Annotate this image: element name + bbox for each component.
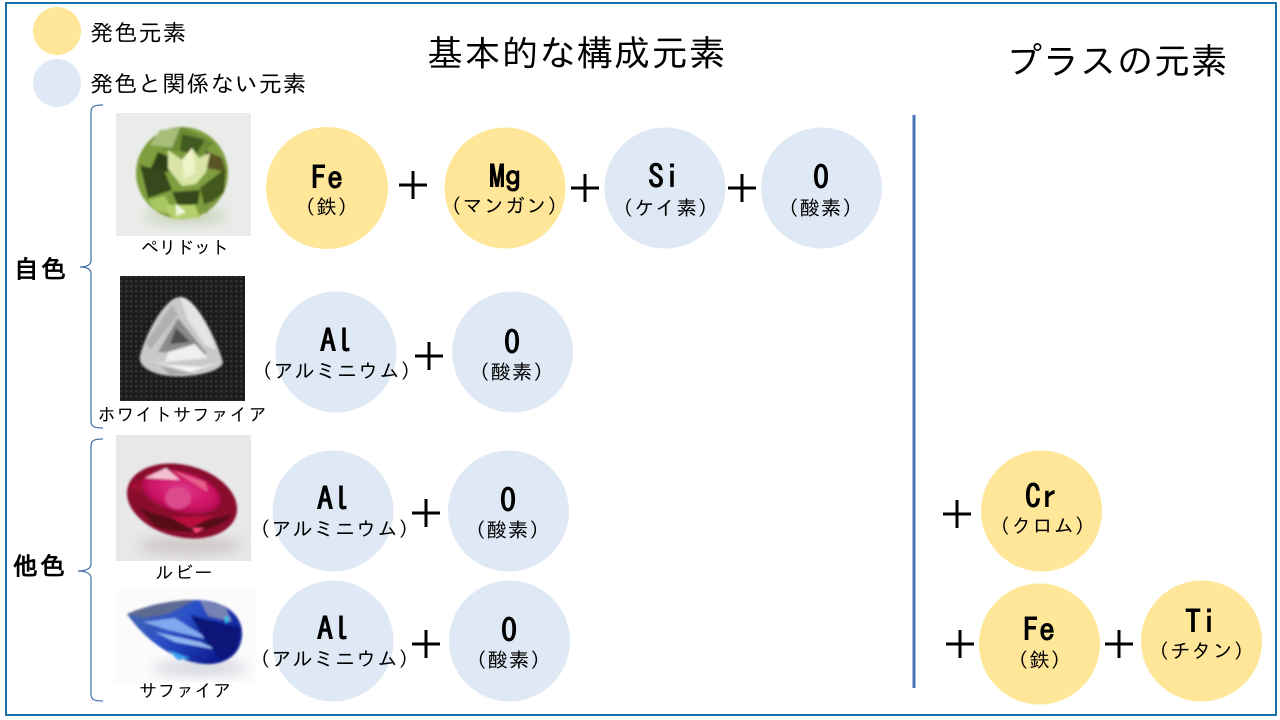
circle: O: （酸素） — [467, 650, 551, 670]
circle: Ti: Ti — [1185, 605, 1217, 637]
legend: colour element label: 発色元素 — [90, 21, 186, 44]
circle: Fe iron — [266, 127, 388, 249]
circle: Al: Al — [320, 324, 352, 356]
brace: allochromatic — [78, 439, 103, 701]
plus — [946, 630, 974, 658]
circle: Al — [250, 450, 420, 572]
circle: O — [449, 580, 570, 702]
caption: white sapphire: ホワイトサファイア — [98, 406, 266, 424]
circle: Mg — [441, 128, 569, 248]
circle: Ti — [1141, 580, 1262, 702]
circle: O: O — [501, 614, 517, 646]
circle: O: O — [813, 161, 829, 193]
legend: colour element swatch — [33, 7, 81, 55]
gem photo: white sapphire — [120, 276, 245, 401]
gem photo: ruby — [116, 435, 251, 561]
gem photo: sapphire — [115, 590, 256, 683]
circle: Fe iron: Fe — [311, 161, 343, 193]
plus — [412, 499, 440, 527]
circle: Si: Si — [648, 160, 680, 192]
circle: Ti: （チタン） — [1149, 641, 1255, 661]
circle: Al — [252, 292, 422, 412]
circle: O: O — [500, 484, 516, 516]
circle: Si — [604, 128, 726, 248]
legend — [33, 7, 306, 107]
circle: Al: Al — [317, 482, 349, 514]
circle: Cr: （クロム） — [990, 516, 1096, 536]
plus — [728, 174, 756, 202]
heading: basic elements: 基本的な構成元素 — [427, 35, 725, 71]
circle: Si: （ケイ素） — [613, 198, 719, 218]
circle: Fe — [979, 584, 1100, 704]
circle: Al: （アルミニウム） — [250, 519, 420, 539]
circle: Al: Al — [317, 612, 349, 644]
circle: Al: （アルミニウム） — [250, 649, 420, 669]
circle: Fe iron: （鉄） — [295, 197, 359, 217]
label: allochromatic: 他色 — [13, 553, 65, 579]
gem photo: peridot — [116, 113, 251, 236]
heading: additional elements: プラスの元素 — [1006, 43, 1227, 79]
circle: Mg: （マンガン） — [441, 196, 569, 216]
circle: Fe: Fe — [1023, 613, 1055, 645]
circle: Al — [250, 580, 420, 702]
circle: O: （酸素） — [466, 520, 550, 540]
caption: peridot: ペリドット — [141, 239, 229, 257]
legend: unrelated element swatch — [33, 59, 81, 107]
brace: idiochromatic — [80, 105, 103, 428]
circle: Mg: Mg — [489, 160, 521, 192]
circle: Cr — [981, 450, 1102, 572]
circle: Cr: Cr — [1025, 480, 1057, 512]
plus — [412, 630, 440, 658]
circle: O — [452, 292, 573, 412]
label: idiochromatic: 自色 — [14, 256, 66, 282]
circle: O: （酸素） — [470, 362, 554, 382]
circle: O — [761, 128, 882, 248]
legend: unrelated element label: 発色と関係ない元素 — [90, 72, 306, 95]
circle: Al: （アルミニウム） — [252, 361, 422, 381]
plus — [943, 500, 971, 528]
plus — [415, 342, 443, 370]
plus — [571, 174, 599, 202]
caption: ruby: ルビー — [156, 564, 212, 582]
plus — [399, 171, 427, 199]
vertical divider — [912, 115, 916, 688]
caption: sapphire: サファイア — [139, 682, 231, 700]
circle: O — [448, 450, 569, 572]
circle: Fe: （鉄） — [1008, 650, 1072, 670]
circle: O: （酸素） — [779, 198, 863, 218]
circle: O: O — [504, 326, 520, 358]
plus — [1105, 630, 1133, 658]
